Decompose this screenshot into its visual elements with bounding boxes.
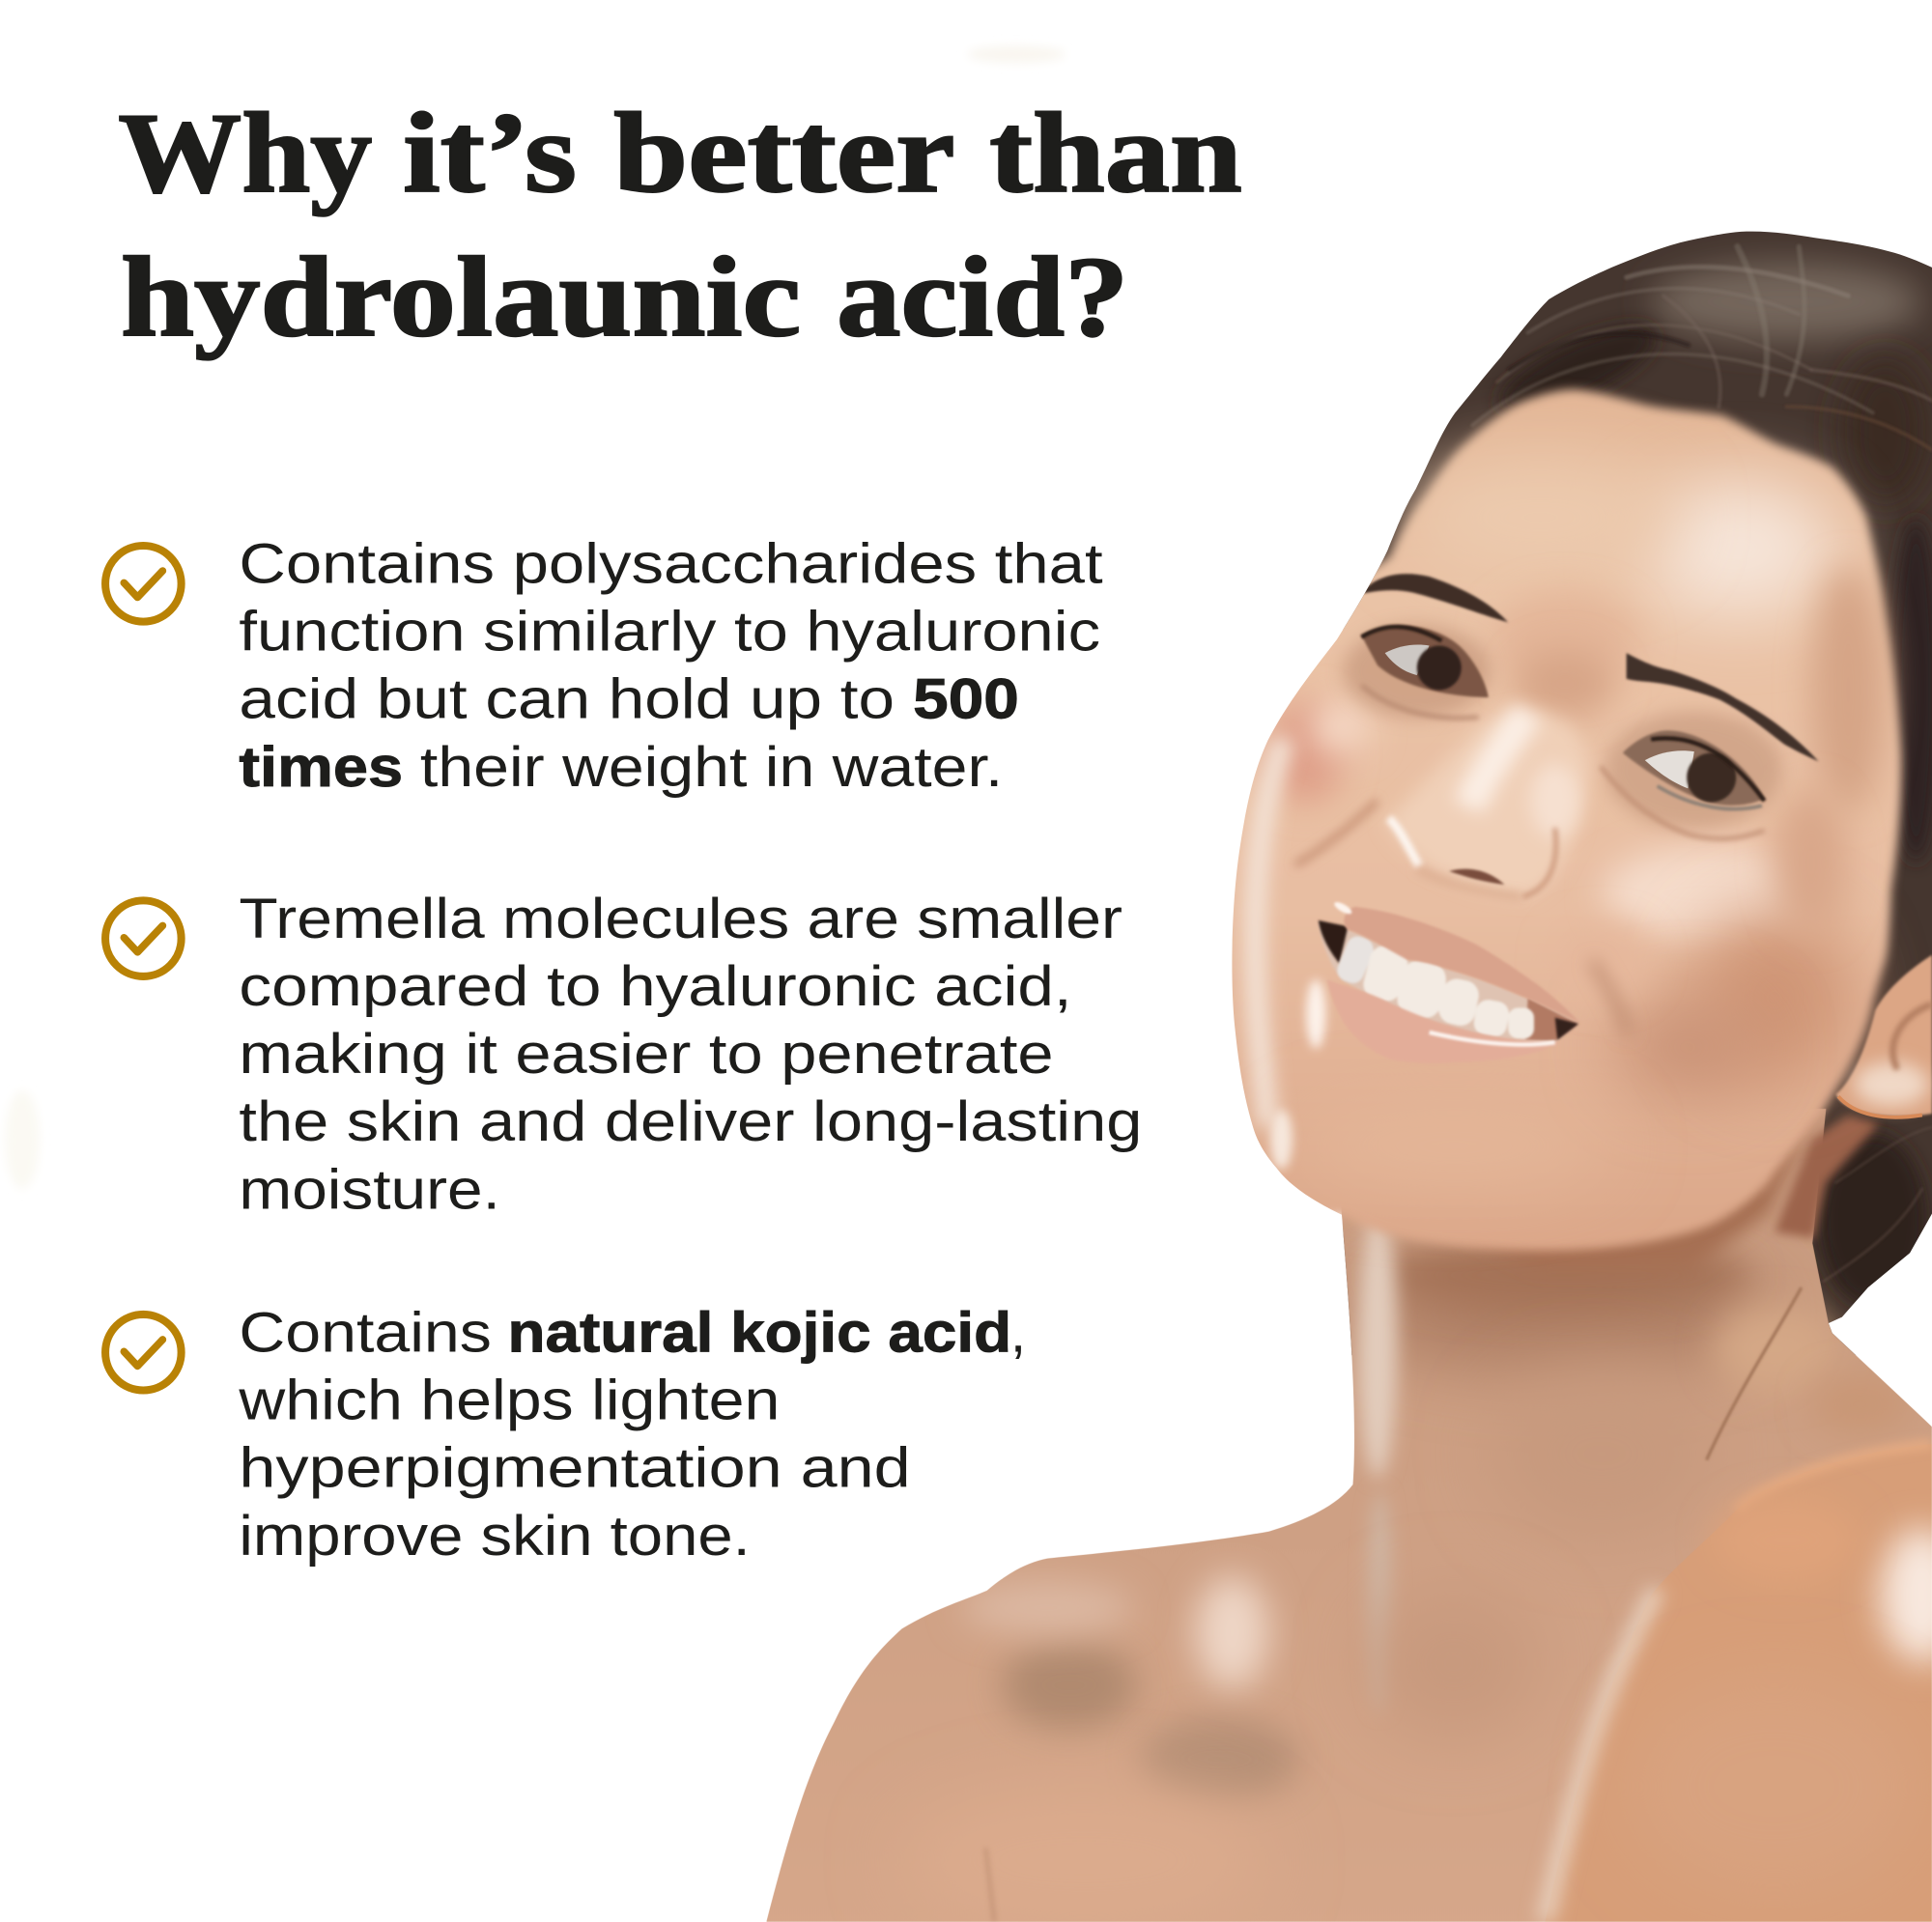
text block 3: [238, 1301, 1026, 1568]
eye sockets: [1343, 625, 1491, 719]
title: hydrolaunic: [121, 233, 801, 360]
benefit 3: [105, 1301, 1026, 1568]
ear: [1836, 955, 1932, 1117]
mouth: [1319, 900, 1579, 1063]
neck and chest base: [690, 1085, 1932, 1922]
smile creases: [1295, 801, 1378, 865]
text block 1: [239, 532, 1103, 799]
text block 1: times: [239, 736, 403, 799]
icon: check circle 1: [105, 546, 182, 622]
mouth cavity and gum: [1319, 921, 1578, 1042]
title: Why: [118, 89, 372, 216]
right eye: [1601, 730, 1765, 838]
text block 2: making it easier to penetrate: [239, 1023, 1054, 1086]
right shoulder: [1545, 1444, 1932, 1922]
face shading: [1255, 456, 1886, 1190]
text block 2: moisture.: [239, 1158, 500, 1221]
left brow: [1360, 574, 1508, 622]
title: better: [613, 89, 955, 216]
faint cream smudges: [5, 45, 1065, 1189]
title: than: [989, 89, 1242, 216]
text block 2: compared to hyaluronic acid,: [239, 955, 1072, 1018]
benefit 2: [105, 888, 1142, 1221]
upper lip: [1344, 907, 1579, 1023]
text block 2: [239, 888, 1142, 1221]
benefit 1: [105, 532, 1103, 799]
text block 2: Tremella molecules are smaller: [239, 888, 1122, 950]
left eye: [1361, 626, 1489, 718]
right brow: [1627, 653, 1819, 761]
title: it’s: [403, 89, 577, 216]
text block 3: ,: [1010, 1301, 1026, 1364]
text block 3: hyperpigmentation and: [239, 1437, 911, 1500]
text block 1: Contains polysaccharides that: [239, 532, 1103, 595]
teeth: [1334, 933, 1534, 1039]
photo: smiling woman: [690, 210, 1932, 1922]
text block 3: which helps lighten: [238, 1369, 780, 1431]
text block 1: acid but can hold up to: [239, 668, 895, 731]
title: acid?: [837, 233, 1128, 360]
text block 1: 500: [913, 668, 1019, 731]
text block 2: the skin and deliver long-lasting: [239, 1090, 1142, 1153]
icon: check circle 2: [105, 900, 182, 976]
title: [118, 89, 1242, 360]
icon: check circle 3: [105, 1314, 182, 1391]
lower lip: [1327, 979, 1559, 1063]
text block 1: their weight in water.: [420, 736, 1003, 799]
text block 3: natural kojic acid: [508, 1301, 1011, 1364]
text block 1: function similarly to hyaluronic: [239, 601, 1100, 664]
text block 3: improve skin tone.: [239, 1505, 751, 1568]
text block 3: Contains: [239, 1301, 492, 1364]
face: [1182, 389, 1932, 1251]
hair: [1343, 210, 1932, 1355]
nose: [1385, 711, 1589, 897]
